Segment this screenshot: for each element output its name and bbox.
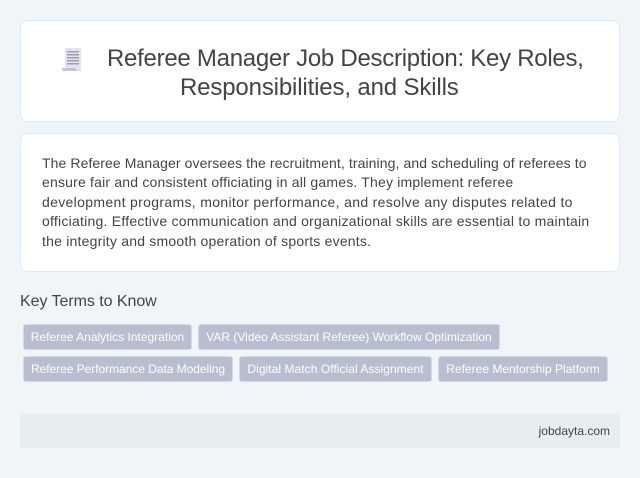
tag <box>23 356 233 382</box>
tag: Referee Performance Data Modeling <box>31 362 225 376</box>
panel: description <box>20 133 620 272</box>
tag <box>23 324 192 350</box>
tag: Referee Analytics Integration <box>31 330 184 344</box>
heading: Referee Manager Job Description: Key Roles, <box>107 45 584 72</box>
text block: description <box>42 155 589 249</box>
heading: Responsibilities, and Skills <box>180 74 459 101</box>
tag <box>198 324 500 350</box>
panel: title card <box>20 20 620 122</box>
tag: Referee Mentorship Platform <box>446 362 600 376</box>
heading <box>107 45 584 101</box>
tag <box>239 356 432 382</box>
footer bar <box>20 414 620 448</box>
text block: description: the integrity and smooth operation of sports events. <box>42 233 371 249</box>
text block: description: The Referee Manager oversees the recruitment, training, and scheduling of referees to <box>42 155 587 171</box>
text block: description: development programs, monitor performance, and resolve any disputes related to <box>42 194 573 210</box>
tag: VAR (Video Assistant Referee) Workflow Optimization <box>206 330 492 344</box>
icon: document scroll <box>62 48 82 71</box>
text block: description: ensure fair and consistent officiating in all games. They implement referee <box>42 174 513 190</box>
tag list <box>23 324 608 382</box>
tag <box>438 356 608 382</box>
tag: Digital Match Official Assignment <box>247 362 424 376</box>
heading: key terms: Key Terms to Know <box>20 293 157 310</box>
text block: description: officiating. Effective communication and organizational skills are essential to maintain <box>42 213 589 229</box>
footer text: jobdayta.com <box>539 424 610 438</box>
